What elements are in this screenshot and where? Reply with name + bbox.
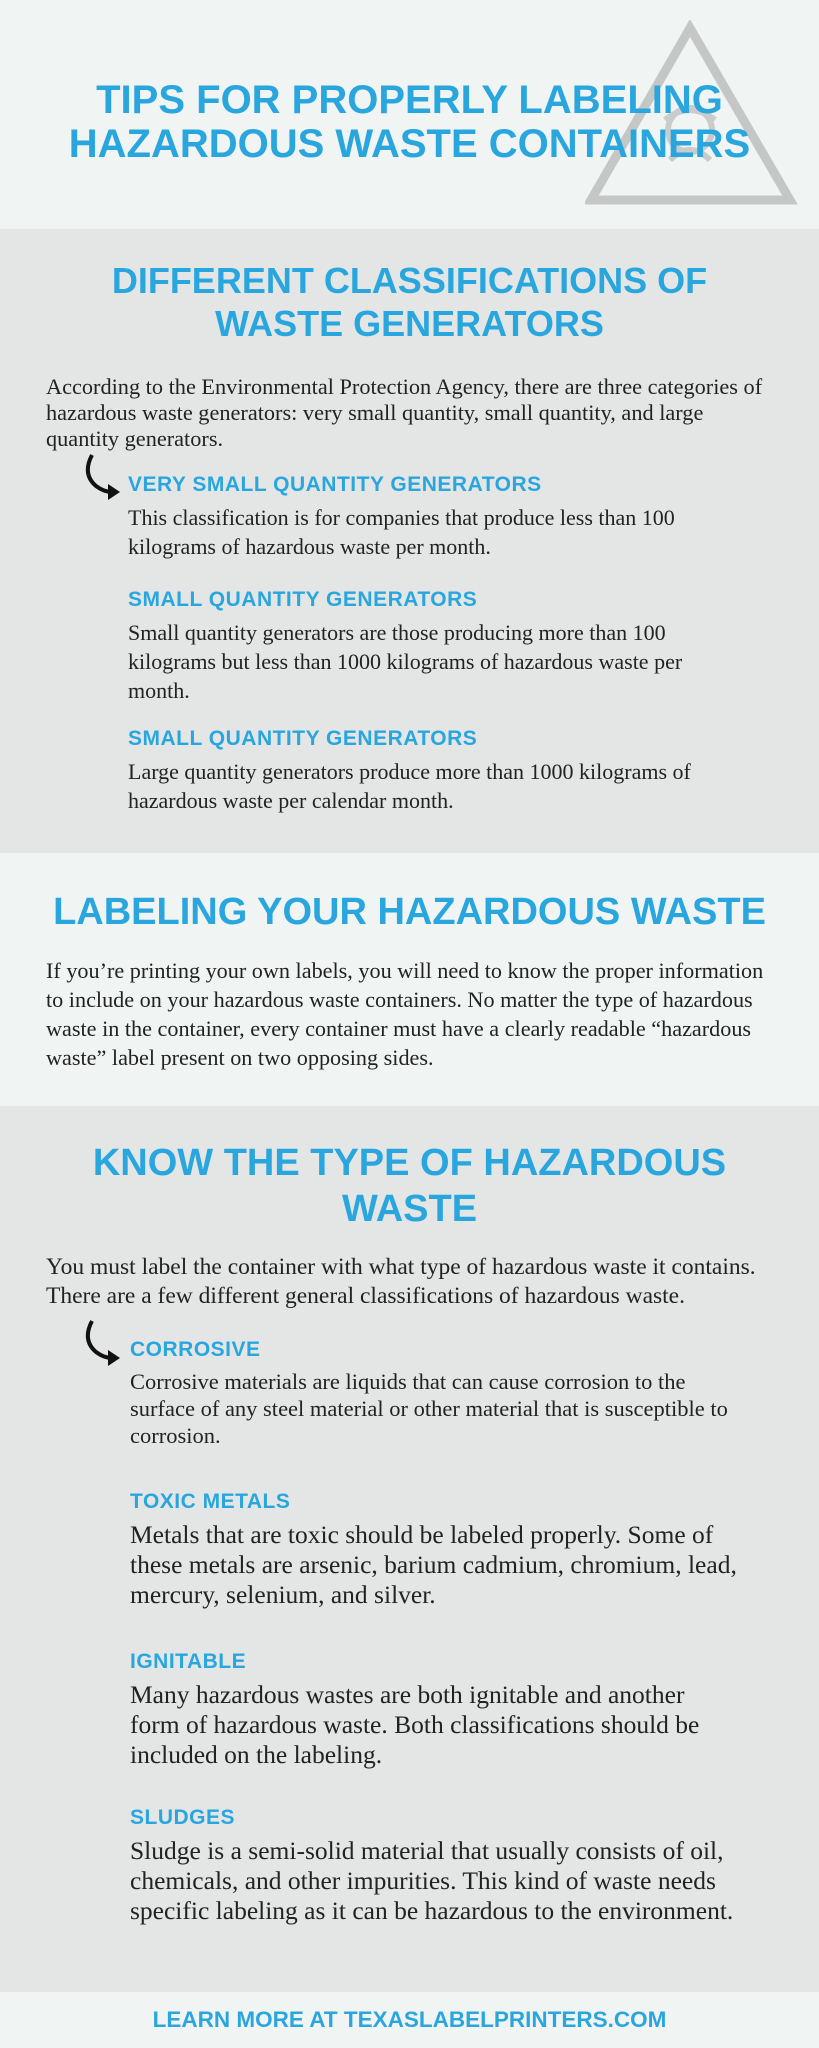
heading: classifications: WASTE GENERATORS [215,303,604,344]
types intro: You must label the container with what type of hazardous waste it contains. [46,1254,756,1280]
icon: arrow [86,454,120,500]
item: sludges: SLUDGES [130,1806,235,1829]
item: ignitable: included on the labeling. [130,1740,382,1769]
intro text: hazardous waste generators: very small quantity, small quantity, and large [46,400,703,425]
item: corrosive [130,1338,728,1448]
item: large [128,727,691,813]
item: sludges: Sludge is a semi-solid material that usually consists of oil, [130,1836,724,1865]
labeling text: waste in the container, every container must have a clearly readable “hazardous [46,1016,751,1041]
item: toxic metals [130,1490,737,1609]
heading: types: KNOW THE TYPE OF HAZARDOUS [93,1142,726,1184]
panel: types [0,1106,819,1992]
heading: types: WASTE [342,1188,477,1230]
item: sludges: chemicals, and other impurities. This kind of waste needs [130,1866,716,1895]
item: very small: This classification is for companies that produce less than 100 [128,505,675,530]
item: ignitable [130,1650,699,1769]
heading: labeling: LABELING YOUR HAZARDOUS WASTE [53,891,766,933]
item: toxic metals: mercury, selenium, and silver. [130,1580,436,1609]
item: large: SMALL QUANTITY GENERATORS [128,727,477,750]
item: corrosive: corrosion. [130,1423,221,1448]
item: corrosive: CORROSIVE [130,1338,261,1361]
types intro [46,1254,756,1309]
item: large: Large quantity generators produce more than 1000 kilograms of [128,759,691,784]
item: ignitable: Many hazardous wastes are both ignitable and another [130,1680,684,1709]
intro text: According to the Environmental Protection Agency, there are three categories of [46,374,762,399]
item: corrosive: surface of any steel material or other material that is susceptible to [130,1396,728,1421]
title [69,78,750,166]
item: large: hazardous waste per calendar month. [128,788,454,813]
heading: types [93,1142,726,1230]
item: small [128,588,682,703]
item: small: kilograms but less than 1000 kilograms of hazardous waste per [128,649,682,674]
item: toxic metals: these metals are arsenic, barium cadmium, chromium, lead, [130,1550,737,1579]
footer [0,1992,819,2048]
icon: arrow [86,1320,120,1366]
labeling text [46,958,763,1070]
panel: classifications [0,229,819,853]
types intro: There are a few different general classifications of hazardous waste. [46,1283,685,1309]
labeling text: to include on your hazardous waste containers. No matter the type of hazardous [46,987,753,1012]
item: sludges [130,1806,733,1925]
heading: classifications: DIFFERENT CLASSIFICATIONS OF [112,260,707,301]
panel: labeling [0,853,819,1106]
item: very small: VERY SMALL QUANTITY GENERATORS [128,473,542,496]
item: ignitable: IGNITABLE [130,1650,246,1673]
item: small: SMALL QUANTITY GENERATORS [128,588,477,611]
item: toxic metals: TOXIC METALS [130,1490,290,1513]
heading: classifications [112,260,707,344]
item: small: month. [128,678,190,703]
icon: biohazard triangle [585,20,798,204]
title: TIPS FOR PROPERLY LABELING [96,78,723,122]
footer text: LEARN MORE AT TEXASLABELPRINTERS.COM [153,2007,666,2032]
intro text: quantity generators. [46,426,223,451]
title: HAZARDOUS WASTE CONTAINERS [69,122,750,166]
labeling text: waste” label present on two opposing sides. [46,1045,434,1070]
item: toxic metals: Metals that are toxic should be labeled properly. Some of [130,1520,713,1549]
item: very small: kilograms of hazardous waste per month. [128,534,491,559]
item: small: Small quantity generators are those producing more than 100 [128,620,666,645]
item: sludges: specific labeling as it can be hazardous to the environment. [130,1896,733,1925]
intro text [46,374,762,451]
item: very small [128,473,675,559]
labeling text: If you’re printing your own labels, you will need to know the proper information [46,958,763,983]
item: ignitable: form of hazardous waste. Both classifications should be [130,1710,699,1739]
header band [0,0,819,229]
item: corrosive: Corrosive materials are liquids that can cause corrosion to the [130,1369,685,1394]
